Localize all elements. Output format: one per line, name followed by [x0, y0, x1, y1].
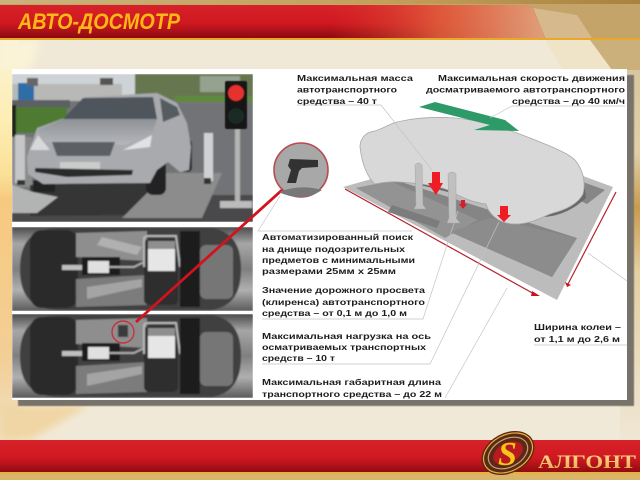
- text: automated search: Автоматизированный поиск: [262, 232, 414, 242]
- text: maximum mass: автотранспортного: [297, 84, 397, 94]
- red load arrow: large: [428, 172, 443, 195]
- underbody scan: reference vehicle: [12, 227, 253, 311]
- dimension arrow: vehicle track length: [345, 189, 540, 296]
- text: maximum mass: средства – 40 т: [297, 96, 377, 106]
- red load arrow: front: [497, 206, 511, 222]
- text: axle load: [262, 331, 431, 363]
- text: automated search: предметов с минимальными: [262, 255, 415, 265]
- underbody scan: vehicle with detected object: [12, 314, 253, 398]
- text: automated search: [262, 232, 415, 276]
- text: ground clearance: (клиренса) автотранспортного: [262, 297, 425, 307]
- text: ground clearance: [262, 285, 425, 318]
- text: axle load: осматриваемых транспортных: [262, 342, 426, 352]
- text: maximum mass: [297, 73, 413, 106]
- red load arrow: small: [459, 200, 467, 209]
- dimension arrow: track width: [565, 192, 616, 287]
- text: maximum mass: Максимальная масса: [297, 73, 413, 83]
- red detection circle on underbody: [112, 321, 134, 343]
- bollard right: [447, 172, 460, 223]
- red connector line to magnified object: [136, 190, 282, 322]
- text: ground clearance: средства – от 0,1 м до 1,0 м: [262, 308, 407, 318]
- white panel: [12, 69, 627, 400]
- text: track width: [534, 322, 621, 344]
- text: overall length: [262, 377, 442, 399]
- text: overall length: транспортного средства – до 22 м: [262, 389, 442, 399]
- logo letter: S: [498, 436, 517, 473]
- inspection platform: [343, 172, 613, 300]
- bottom red band: [0, 440, 640, 474]
- logo emblem: [474, 422, 542, 480]
- bollard left: [414, 163, 426, 209]
- title: АВТО-ДОСМОТР: [17, 9, 180, 34]
- leader lines: [258, 105, 627, 398]
- text: track width: от 1,1 м до 2,6 м: [534, 334, 620, 344]
- photo: car on inspection platform with traffic light: [12, 74, 253, 222]
- green direction arrow: [419, 102, 519, 131]
- logo wordmark: АЛГОНТ: [538, 452, 636, 473]
- magnified object: pistol: [274, 143, 328, 197]
- text: maximum speed: средства – до 40 км/ч: [512, 96, 625, 106]
- text: overall length: Максимальная габаритная длина: [262, 377, 441, 387]
- text: maximum speed: досматриваемого автотранспортного: [426, 84, 625, 94]
- vehicle silhouette: [360, 117, 584, 224]
- company logo: [474, 422, 636, 480]
- text: track width: Ширина колеи –: [534, 322, 621, 332]
- text: automated search: размерами 25мм х 25мм: [262, 266, 396, 276]
- text: maximum speed: Максимальная скорость движения: [438, 73, 625, 83]
- text: axle load: Максимальная нагрузка на ось: [262, 331, 431, 341]
- top red title band: [0, 4, 640, 40]
- text: maximum speed: [426, 73, 625, 106]
- panel shadow: [18, 75, 634, 406]
- text: axle load: средств – 10 т: [262, 353, 335, 363]
- text: ground clearance: Значение дорожного просвета: [262, 285, 425, 295]
- text: automated search: на днище подозрительных: [262, 244, 405, 254]
